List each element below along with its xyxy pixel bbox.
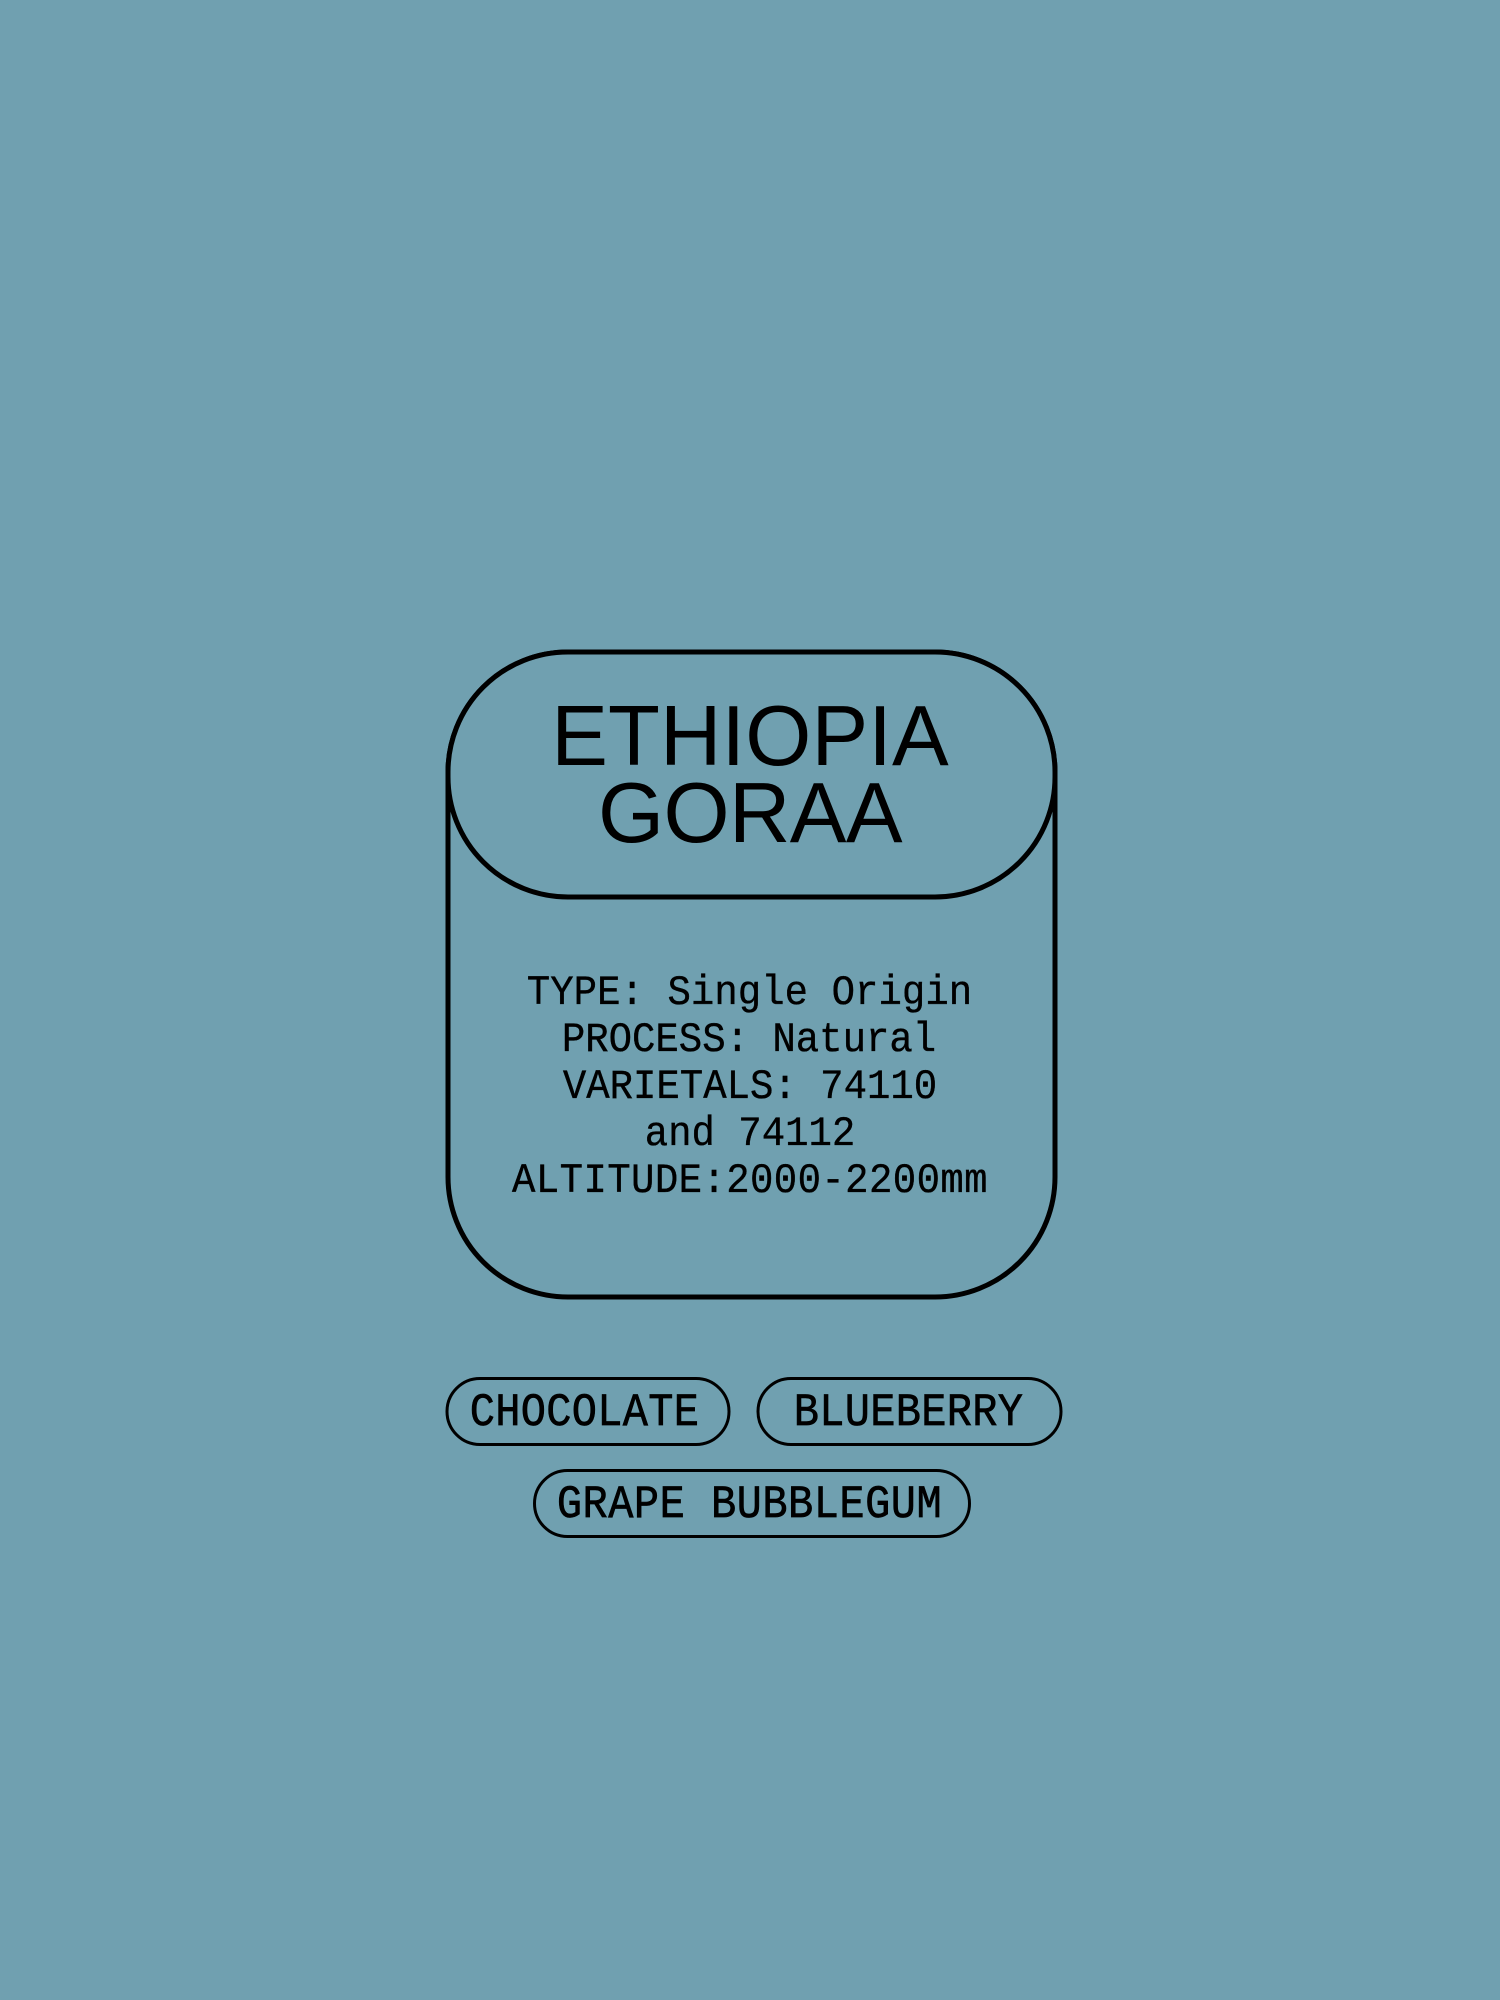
- tag: blueberry: BLUEBERRY: [794, 1387, 1023, 1440]
- title: [551, 689, 949, 861]
- title pill outline: [448, 652, 1055, 897]
- coffee details text: ALTITUDE:2000-2200mm: [512, 1159, 988, 1205]
- panel: coffee label card: [448, 652, 1055, 1297]
- title: ETHIOPIA: [551, 689, 949, 784]
- coffee details text: and 74112: [645, 1112, 855, 1158]
- card outline: [448, 652, 1055, 1297]
- coffee details text: [512, 971, 988, 1205]
- flavor tags: [447, 1378, 1061, 1536]
- title: GORAA: [598, 766, 903, 861]
- tag: grape bubblegum: GRAPE BUBBLEGUM: [557, 1479, 942, 1532]
- tag: chocolate: [447, 1378, 729, 1444]
- coffee details text: PROCESS: Natural: [562, 1018, 936, 1064]
- tag: chocolate: CHOCOLATE: [470, 1387, 699, 1440]
- coffee details text: VARIETALS: 74110: [563, 1065, 937, 1111]
- tag: blueberry: [758, 1378, 1061, 1444]
- coffee details text: TYPE: Single Origin: [527, 971, 972, 1017]
